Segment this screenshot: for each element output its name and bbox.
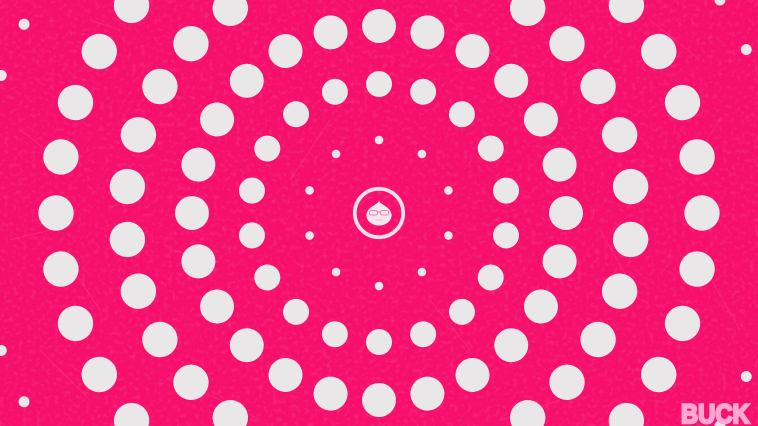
icon: central face with glasses in ring — [355, 189, 403, 237]
dot ring 3 — [175, 9, 583, 417]
dot ring 1: inner small dots — [304, 136, 454, 290]
dot ring 4 — [108, 0, 650, 426]
dot ring 2 — [237, 71, 521, 355]
